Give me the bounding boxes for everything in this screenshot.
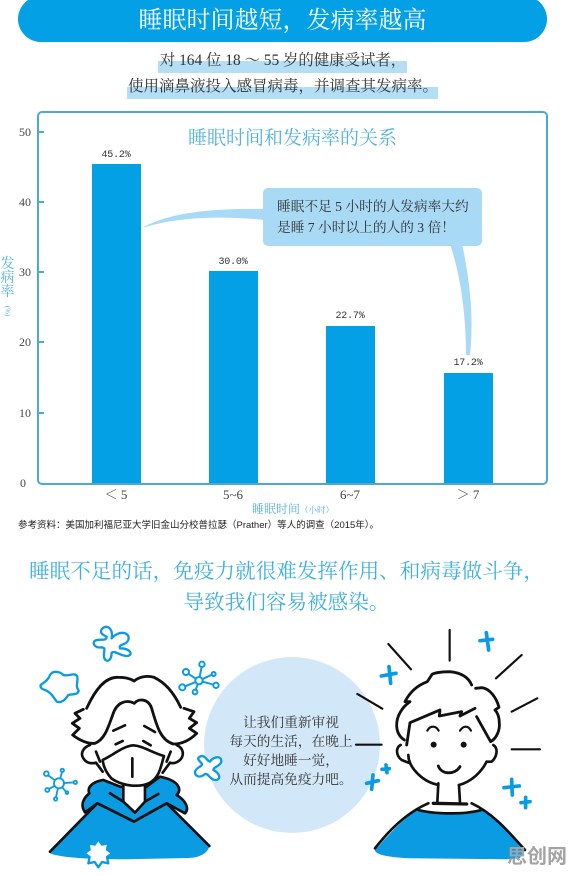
- conclusion heading: 睡眠不足的话，免疫力就很难发挥作用、和病毒做斗争，: [29, 561, 544, 583]
- watermark: 思创网: [507, 846, 567, 868]
- y axis labels: [19, 125, 31, 490]
- chart: [0, 111, 548, 516]
- axis tick marks: [39, 131, 44, 414]
- value 30.0%: 30.0%: [218, 257, 248, 268]
- y axis labels: 50: [19, 125, 31, 139]
- chart title: 睡眠时间和发病率的关系: [188, 128, 397, 149]
- bar: 6-7 hours: [326, 326, 375, 483]
- y axis labels: 40: [19, 195, 31, 209]
- x label under 5: ＜ 5: [105, 487, 127, 502]
- y axis title: 病: [0, 271, 14, 286]
- illustration: sick person with mask: [41, 627, 221, 867]
- illustration: healthy person: [356, 630, 540, 859]
- bar: under 5 hours: [92, 164, 141, 483]
- hair: [72, 676, 197, 744]
- y axis labels: 20: [19, 335, 31, 349]
- advice circle: [204, 657, 380, 833]
- ears: [397, 745, 497, 763]
- advice text: 好好地睡一觉，: [243, 753, 339, 768]
- value 45.2%: 45.2%: [101, 150, 130, 161]
- y axis labels: 0: [20, 476, 26, 490]
- chart frame: [37, 111, 548, 485]
- molecule top right: [179, 662, 219, 694]
- description line 2: 使用滴鼻液投入感冒病毒，并调查其发病率。: [128, 78, 438, 95]
- hood: [83, 777, 187, 822]
- bar: over 7 hours: [444, 373, 493, 483]
- x label over 7: ＞ 7: [457, 487, 479, 502]
- virus blob top: [94, 627, 131, 661]
- virus blob right: [195, 756, 221, 780]
- eyes: [113, 725, 155, 745]
- callout: [263, 188, 482, 246]
- conclusion heading: [29, 560, 544, 614]
- y axis title: (%): [4, 306, 12, 316]
- study description: [127, 52, 438, 99]
- title banner: 睡眠时间越短，发病率越高: [138, 8, 426, 34]
- highlight line 1: [158, 61, 407, 73]
- value 17.2%: 17.2%: [453, 358, 482, 369]
- callout text: [277, 199, 469, 234]
- rays: [356, 630, 540, 749]
- y axis title: [0, 256, 14, 316]
- value 22.7%: 22.7%: [335, 311, 364, 322]
- x label 6-7: 6~7: [340, 487, 360, 502]
- y axis labels: 10: [19, 406, 31, 420]
- molecule lower left: [44, 769, 77, 801]
- face: [408, 755, 487, 785]
- sweater outlines and folds: [50, 786, 209, 852]
- highlight line 2: [127, 87, 438, 99]
- hair: [397, 672, 499, 745]
- face: [97, 707, 170, 786]
- x label 5-6: 5~6: [223, 487, 243, 502]
- collar bar: [433, 798, 467, 809]
- shirt: [375, 809, 523, 859]
- conclusion heading: 导致我们容易被感染。: [184, 592, 389, 614]
- ears: [82, 745, 183, 773]
- y axis labels: 30: [19, 265, 31, 279]
- eyes and brows: [427, 727, 471, 731]
- y axis title: 发: [0, 257, 14, 272]
- y axis title: 率: [0, 285, 14, 300]
- collar: [123, 786, 145, 812]
- smile: [438, 766, 460, 773]
- advice text: [229, 715, 353, 787]
- sparkles: [367, 633, 530, 808]
- shoulders and collar: [375, 803, 525, 850]
- callout text: 是睡 7 小时以上的人的 3 倍！: [277, 220, 455, 234]
- mask: [103, 745, 164, 786]
- virus blob left: [41, 672, 79, 702]
- x axis title: 睡眠时间（小时）: [252, 502, 334, 516]
- advice text: 从而提高免疫力吧。: [229, 772, 353, 787]
- source note: 参考资料：美国加利福尼亚大学旧金山分校普拉瑟（Prather）等人的调查（2015年）。: [18, 520, 379, 531]
- advice text: 每天的生活，在晚上: [229, 734, 353, 749]
- neck: [437, 783, 460, 803]
- advice text: 让我们重新审视: [243, 715, 339, 730]
- star virus on sweater: [84, 839, 112, 867]
- sweater: [50, 803, 209, 859]
- description line 1: 对 164 位 18 ～ 55 岁的健康受试者，: [160, 52, 406, 69]
- title banner: [18, 0, 547, 42]
- bar: 5-6 hours: [209, 271, 258, 483]
- callout text: 睡眠不足 5 小时的人发病率大约: [277, 199, 469, 214]
